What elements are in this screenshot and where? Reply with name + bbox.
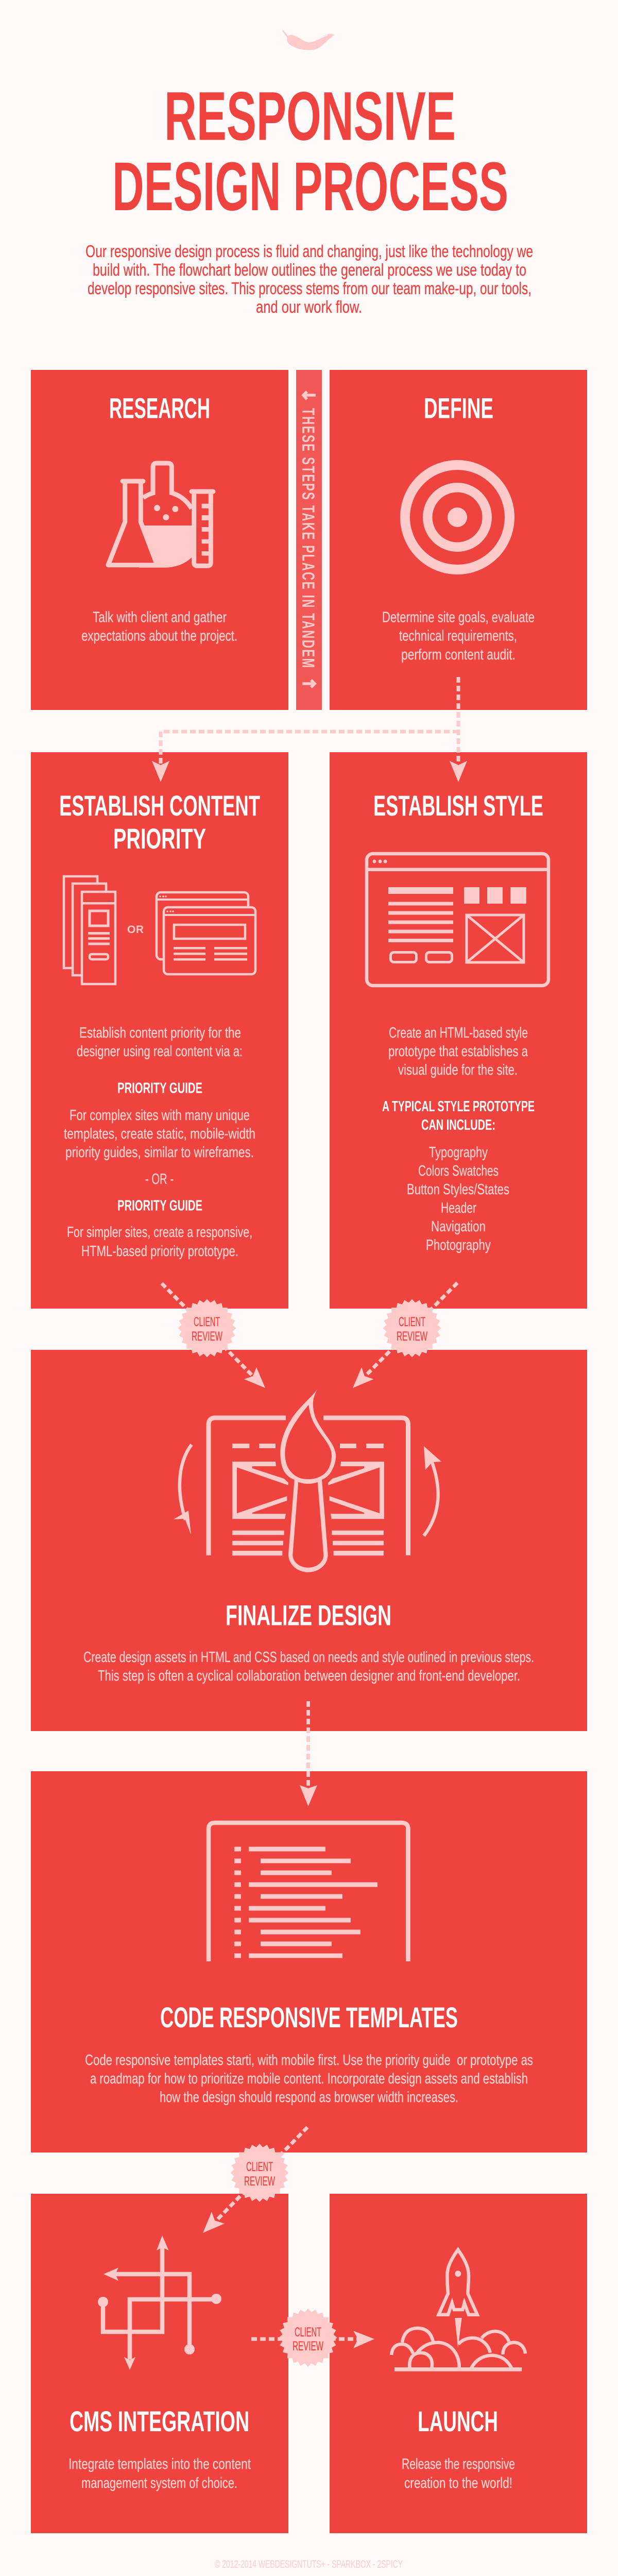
style description: visual guide for the site.: [398, 1062, 518, 1078]
panel: establish content priority: [31, 752, 288, 1309]
icon: rocket launch: [391, 2250, 525, 2371]
footer credit: © 2012-2014 WEBDESIGNTUTS+ - SPARKBOX - 2SPICY: [215, 2558, 403, 2570]
list: prototype contents: Button Styles/States: [407, 1181, 509, 1198]
badge: client review code: REVIEW: [244, 2174, 275, 2189]
icon: priority guide pages or browsers: [64, 876, 255, 984]
code description: how the design should respond as browser width increases.: [160, 2089, 458, 2106]
style description: [388, 1025, 528, 1078]
launch description: creation to the world!: [404, 2475, 512, 2492]
define description: Determine site goals, evaluate: [382, 609, 535, 625]
title: [112, 78, 508, 225]
research description: [81, 609, 237, 644]
arrow: define to content priority and style: [152, 677, 467, 782]
subheading: typical prototype: [382, 1098, 535, 1133]
panel: define: [330, 370, 587, 710]
icon: arrow left: [303, 392, 316, 399]
subheading: typical prototype: CAN INCLUDE:: [421, 1117, 495, 1133]
badge: client review left: [178, 1299, 236, 1357]
heading: launch: LAUNCH: [418, 2405, 498, 2437]
text: simpler sites: HTML-based priority prototype.: [81, 1243, 238, 1260]
content priority intro: [77, 1025, 243, 1060]
icon: chili logo: [282, 30, 334, 50]
text: simpler sites: For simpler sites, create a responsive,: [67, 1224, 252, 1241]
badge: client review code: [231, 2144, 288, 2202]
icon: target: [405, 465, 510, 570]
define description: perform content audit.: [401, 647, 516, 663]
panel: research: [31, 370, 288, 710]
intro text block: and our work flow.: [256, 297, 362, 316]
panel: launch: [330, 2194, 587, 2533]
badge: client review cms: REVIEW: [293, 2339, 323, 2353]
icon: style prototype browser: [366, 854, 550, 986]
list: prototype contents: Photography: [426, 1237, 491, 1253]
content priority intro: Establish content priority for the: [79, 1025, 241, 1041]
title: RESPONSIVE: [164, 78, 456, 155]
code description: [85, 2052, 533, 2106]
launch description: Release the responsive: [402, 2456, 515, 2472]
text: complex sites: priority guides, similar to wireframes.: [65, 1144, 254, 1161]
text: complex sites: For complex sites with many unique: [70, 1107, 250, 1124]
arrow: cms to launch: [251, 2331, 374, 2348]
badge: client review code: CLIENT: [246, 2160, 273, 2174]
style description: Create an HTML-based style: [389, 1025, 528, 1041]
badge: client review cms: [279, 2309, 337, 2367]
text: complex sites: [64, 1107, 255, 1161]
panel: code responsive templates: [31, 1771, 587, 2153]
arrow: content priority to finalize: [162, 1283, 265, 1388]
research description: expectations about the project.: [81, 628, 237, 644]
heading: cms integration: CMS INTEGRATION: [70, 2405, 249, 2437]
icon: priority guide pages or browsers: OR: [127, 924, 144, 936]
badge: client review left: CLIENT: [194, 1315, 220, 1329]
panel: finalize design: [31, 1350, 587, 1731]
icon: flasks: [108, 463, 213, 568]
list: prototype contents: Colors Swatches: [418, 1163, 499, 1179]
panel: cms integration: [31, 2194, 288, 2533]
icon: brush over layout: [174, 1389, 441, 1572]
heading: finalize design: FINALIZE DESIGN: [226, 1599, 391, 1631]
intro text block: [85, 242, 533, 316]
cms description: Integrate templates into the content: [68, 2456, 251, 2472]
badge: client review cms: CLIENT: [295, 2325, 321, 2340]
define description: technical requirements,: [399, 628, 517, 644]
heading: research: RESEARCH: [109, 392, 210, 425]
heading: establish content priority: [59, 789, 260, 855]
launch description: [402, 2456, 515, 2492]
finalize description: [83, 1649, 534, 1684]
subheading: typical prototype: A TYPICAL STYLE PROTOTYPE: [382, 1098, 535, 1115]
list: prototype contents: Navigation: [431, 1218, 486, 1235]
cms description: management system of choice.: [81, 2475, 237, 2492]
cms description: [68, 2456, 251, 2492]
badge: client review right: REVIEW: [397, 1329, 427, 1344]
list: prototype contents: [407, 1144, 509, 1253]
arrow: finalize to code: [300, 1701, 317, 1806]
text: simpler sites: [67, 1224, 252, 1260]
research description: Talk with client and gather: [93, 609, 227, 625]
tandem label: THESE STEPS TAKE PLACE IN TANDEM: [298, 408, 318, 668]
badge: client review left: REVIEW: [192, 1329, 222, 1344]
icon: arrow right: [302, 680, 315, 687]
heading: code responsive templates: CODE RESPONSIVE TEMPLATES: [160, 2001, 458, 2033]
text: complex sites: templates, create static, mobile-width: [64, 1126, 255, 1142]
badge: client review right: [383, 1299, 441, 1357]
panel: tandem strip: [296, 370, 322, 710]
text: or: - OR -: [145, 1171, 174, 1188]
subheading: priority guide second: PRIORITY GUIDE: [117, 1197, 202, 1214]
panel: establish style: [330, 752, 587, 1309]
icon: code window: [209, 1823, 408, 1961]
heading: establish content priority: ESTABLISH CONTENT: [59, 789, 260, 822]
subheading: priority guide: PRIORITY GUIDE: [117, 1080, 202, 1096]
arrow: code to cms: [203, 2127, 307, 2233]
define description: [382, 609, 535, 663]
heading: establish content priority: PRIORITY: [113, 822, 206, 855]
list: prototype contents: Header: [441, 1200, 476, 1216]
arrow: style to finalize: [353, 1283, 457, 1388]
icon: routing lines: [98, 2235, 221, 2370]
badge: client review right: CLIENT: [399, 1315, 425, 1329]
heading: define: DEFINE: [424, 392, 493, 425]
list: prototype contents: Typography: [429, 1144, 488, 1161]
style description: prototype that establishes a: [388, 1043, 528, 1060]
content priority intro: designer using real content via a:: [77, 1043, 243, 1060]
